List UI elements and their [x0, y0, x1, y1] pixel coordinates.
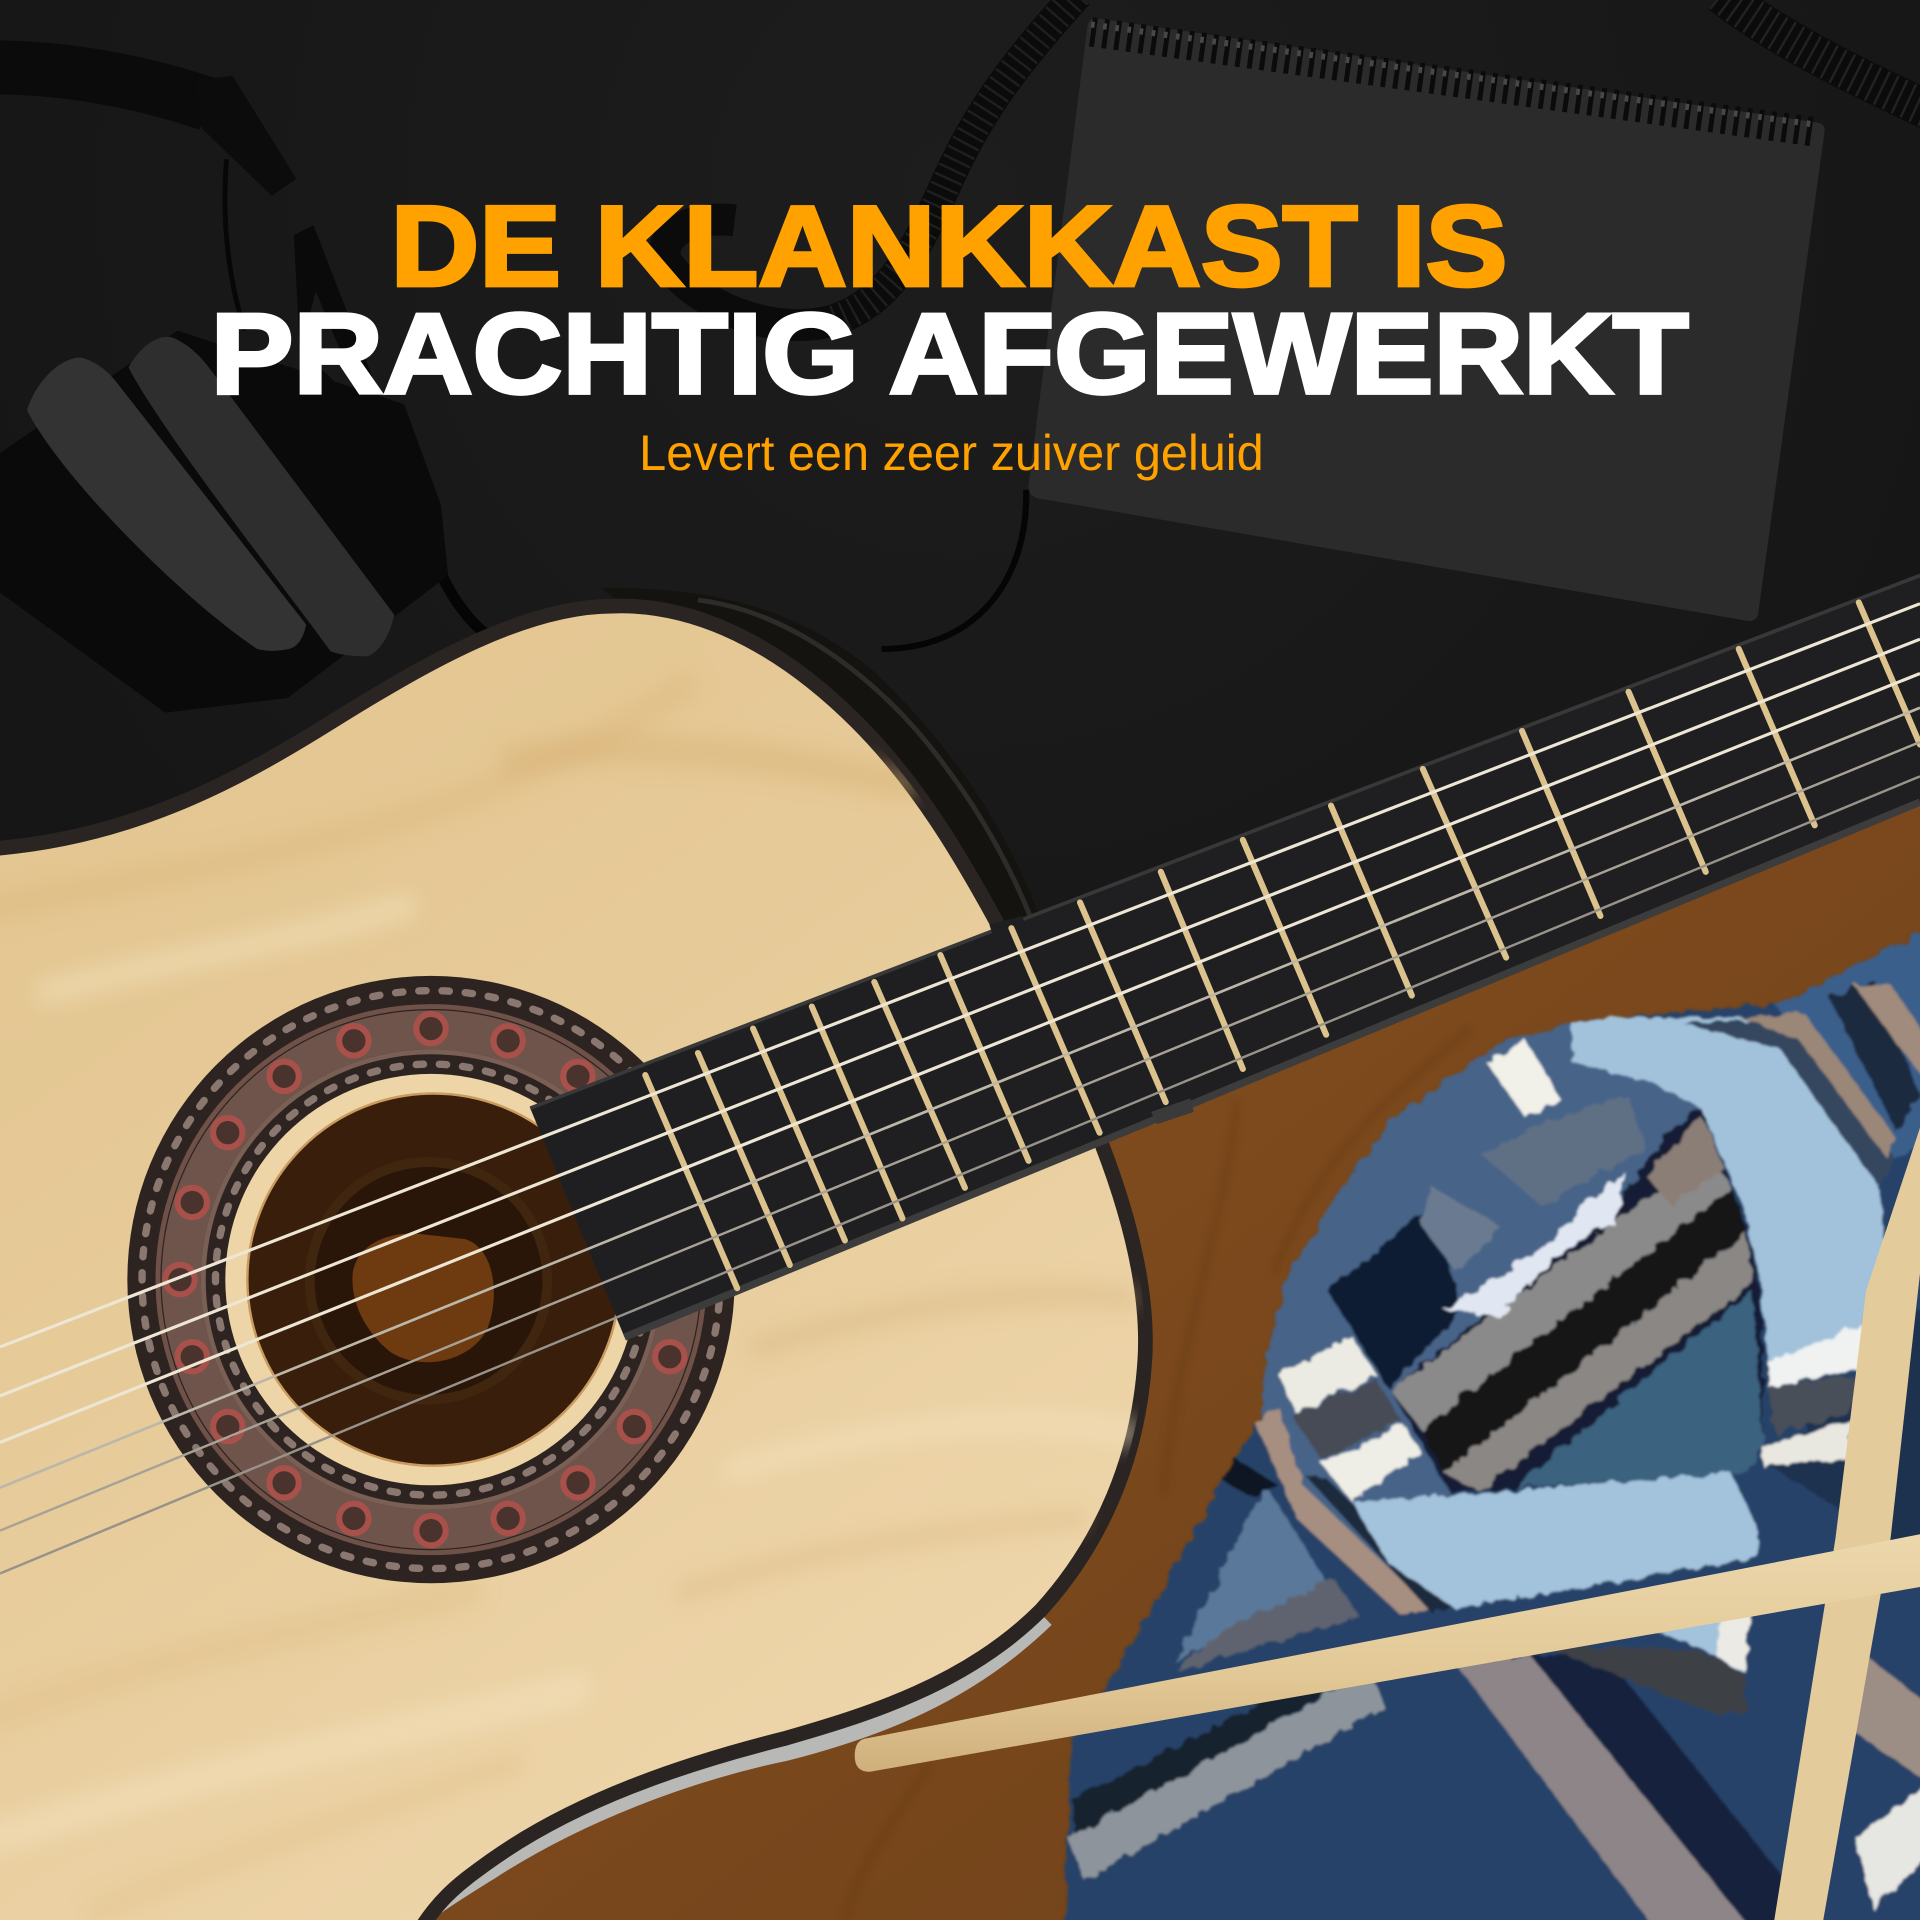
wood ring	[225, 1074, 637, 1485]
subtitle: Levert een zeer zuiver geluid	[639, 425, 1264, 481]
lower binding	[404, 1619, 1046, 1920]
jacket	[1064, 909, 1920, 1920]
flannel lining	[1391, 1108, 1764, 1491]
tag label	[1444, 1173, 1626, 1316]
fretboard	[530, 576, 1920, 1337]
stick vertical	[1774, 1128, 1920, 1920]
upper right plaid	[1774, 909, 1920, 1161]
title	[211, 183, 1689, 481]
headphones	[0, 67, 448, 713]
lower plaid	[1068, 1671, 1384, 1880]
bottom collar	[1352, 1473, 1758, 1609]
jacket base	[1064, 909, 1920, 1920]
fork	[294, 225, 416, 514]
wood table	[410, 784, 1920, 1920]
thin wire	[882, 490, 1026, 649]
sound hole	[247, 1093, 620, 1466]
ear pad rear	[129, 337, 394, 656]
rosette	[127, 976, 735, 1583]
heel tab	[989, 916, 1041, 992]
ear pad front	[27, 358, 306, 651]
white stripes	[1278, 1336, 1376, 1414]
notebook spiral binding	[1091, 24, 1817, 132]
body top	[0, 606, 1145, 1920]
coiled cables	[441, 0, 1920, 649]
title line 1: DE KLANKKAST IS	[391, 183, 1507, 310]
rosette flowers	[165, 1014, 697, 1545]
left collar	[1260, 1020, 1701, 1592]
stick horizontal	[855, 1534, 1920, 1772]
label inside	[310, 1162, 547, 1400]
side rim	[600, 588, 1041, 955]
notebook	[1028, 18, 1825, 621]
strings	[0, 604, 1920, 1573]
right collar	[1572, 1018, 1891, 1362]
tan band	[1254, 1407, 1431, 1615]
drumsticks	[855, 1128, 1920, 1920]
wood grain	[0, 686, 1127, 1910]
ear cup	[0, 331, 448, 713]
headband	[0, 67, 208, 104]
title line 2: PRACHTIG AFGEWERKT	[211, 291, 1689, 418]
guitar	[0, 576, 1920, 1920]
logo inside	[352, 1233, 494, 1362]
frets	[645, 602, 1920, 1288]
